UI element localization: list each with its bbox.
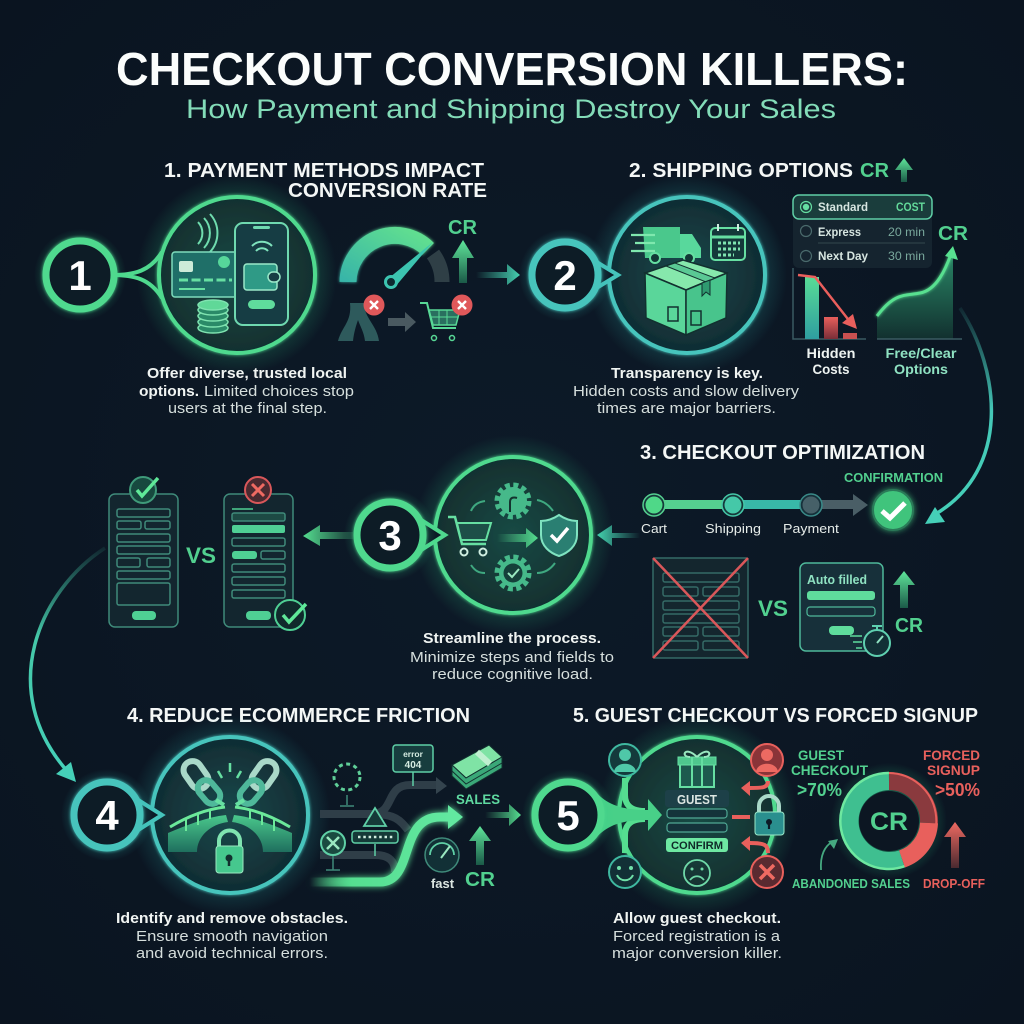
body text 1: Offer diverse, trusted local (147, 365, 347, 382)
auto filled form (800, 563, 890, 656)
shipping options list: COST (896, 200, 926, 214)
number badge 3: 3 (378, 512, 402, 559)
VS label right: VS (758, 596, 788, 621)
arrow: gray (388, 312, 416, 332)
number badge 2: 2 (553, 252, 577, 299)
number badge 5 with merged pointer arrow: 5 (556, 792, 580, 839)
red arrows (732, 781, 768, 853)
body text 1: users at the final step. (168, 400, 327, 417)
guest form: CONFIRM (671, 840, 723, 852)
body text 4: Identify and remove obstacles. (116, 910, 348, 927)
error 404 sign: 404 (405, 760, 422, 771)
forced signup stat (923, 747, 980, 800)
VS label left: VS (186, 543, 216, 568)
arrow: abandoned sales pointer (821, 839, 838, 870)
body text 1: options. (139, 383, 199, 400)
number badge 1 (34, 229, 126, 321)
bar chart: hidden costs (793, 268, 866, 377)
error 404 sign: error (403, 749, 424, 759)
area chart: free clear options (877, 223, 969, 377)
avatar: forced user (751, 744, 783, 776)
forced signup stat: >50% (935, 780, 980, 800)
sad face (684, 860, 710, 886)
auto filled form: Auto filled (807, 572, 867, 587)
body text 5: Forced registration is a (613, 928, 781, 945)
body text 2 (573, 365, 800, 417)
checkout stepper (641, 470, 943, 536)
fast gauge (425, 838, 459, 891)
body text 2: Transparency is key. (611, 365, 763, 382)
broken bridge illustration circle (130, 715, 330, 915)
body text 2: times are major barriers. (597, 400, 776, 417)
number badge 4 (61, 769, 162, 861)
guest checkout stat: >70% (797, 780, 842, 800)
panel: 5 guest checkout (522, 705, 985, 962)
heading 1: CONVERSION RATE (288, 180, 487, 202)
error 404 sign (393, 745, 433, 786)
arrow: 1 to 2 (476, 264, 520, 285)
heading 2 (629, 158, 913, 182)
body text 3: Minimize steps and fields to (410, 649, 614, 666)
number badge 4: 4 (95, 792, 119, 839)
guest checkout stat: GUEST (798, 747, 844, 763)
shipping options list: 30 min (888, 249, 925, 263)
donut chart (831, 763, 947, 879)
area chart: free clear options: Options (894, 361, 948, 377)
coin stack (198, 300, 228, 333)
body text 5 (612, 910, 782, 962)
checkout stepper: Cart (641, 521, 667, 536)
panel: 1 payment methods (34, 160, 520, 417)
forced signup stat: SIGNUP (927, 762, 980, 778)
heading 5: 5. GUEST CHECKOUT VS FORCED SIGNUP (573, 705, 978, 727)
shipping options list: Express (818, 225, 861, 239)
bar chart: hidden costs: Hidden (806, 345, 856, 361)
gift icon (678, 752, 716, 787)
CR up arrow (448, 217, 478, 283)
avatar: guest (609, 744, 641, 776)
body text 5: major conversion killer. (612, 945, 782, 962)
body text 4: Ensure smooth navigation (136, 928, 328, 945)
heading 2: CR (860, 160, 890, 182)
body text 3: reduce cognitive load. (432, 666, 593, 683)
broken bridge (168, 807, 292, 852)
smiley (609, 856, 641, 888)
body text 1: Limited choices stop (204, 383, 354, 400)
panel: 4 reduce friction (61, 705, 521, 962)
CR up arrow (893, 571, 924, 637)
area chart: free clear options: Free/Clear (886, 345, 957, 361)
number badge 2 (519, 229, 618, 321)
gauge chart (348, 235, 442, 288)
green road arrow (310, 805, 463, 882)
guest checkout stat: CHECKOUT (791, 762, 868, 778)
payment illustration circle (112, 175, 337, 375)
funnel blocked icon (338, 294, 384, 341)
guest checkout stat (791, 747, 868, 800)
panel: 3 checkout optimization (109, 435, 943, 683)
crossed-out long form (653, 558, 748, 658)
body text 4: and avoid technical errors. (136, 945, 328, 962)
checkout stepper: Shipping (705, 521, 761, 536)
heading 2: 2. SHIPPING OPTIONS (629, 160, 853, 182)
body text 1 (139, 365, 354, 417)
CR up arrow: CR (448, 217, 478, 239)
long form with x and check (224, 477, 306, 630)
CR up arrow: CR (465, 869, 496, 891)
arrow: to forms (303, 525, 353, 546)
guest form: GUEST (677, 792, 717, 807)
body text 2: Hidden costs and slow delivery (573, 383, 800, 400)
arrow: 3 to 4 curved (30, 548, 105, 782)
heading 1: 1. PAYMENT METHODS IMPACT (164, 160, 484, 182)
donut chart: CR (870, 808, 908, 836)
checkout stepper: Payment (783, 521, 839, 536)
guest checkout illustration circle (597, 715, 797, 915)
broken chain (180, 758, 280, 807)
forced signup stat: FORCED (923, 747, 980, 763)
heading 1 (164, 160, 487, 202)
short form with check (109, 477, 178, 627)
red drop-off arrow (944, 822, 966, 868)
panel: 2 shipping options (519, 158, 969, 417)
body text 3 (410, 630, 614, 683)
abandoned sales label: ABANDONED SALES (792, 876, 910, 891)
CR up arrow: CR (895, 615, 924, 637)
shipping options list: 20 min (888, 225, 925, 239)
shipping options list: Next Day (818, 249, 868, 263)
area chart: free clear options: CR (938, 223, 969, 245)
drop-off label: DROP-OFF (923, 876, 985, 891)
heading 3: 3. CHECKOUT OPTIMIZATION (640, 442, 925, 464)
parcel box (645, 260, 727, 335)
friction road diagram (310, 745, 463, 882)
spinner icon (334, 764, 360, 806)
body text 4 (116, 910, 348, 962)
arrow: to circle 3 (597, 525, 640, 546)
money stack: SALES (456, 791, 500, 807)
warning sign (364, 808, 386, 826)
body text 3: Streamline the process. (423, 630, 601, 647)
shipping options list: Standard (818, 200, 868, 214)
optimization illustration circle (413, 435, 613, 635)
number badge 5 with merged pointer arrow (522, 769, 662, 861)
heading 4: 4. REDUCE ECOMMERCE FRICTION (127, 705, 470, 727)
arrow: 4 to 5 (485, 804, 521, 826)
x sign (321, 831, 345, 870)
red x badge (751, 856, 783, 888)
shipping illustration circle (587, 175, 787, 375)
checkout stepper: CONFIRMATION (844, 470, 943, 485)
password field (352, 831, 398, 856)
padlock (755, 796, 784, 835)
title: CHECKOUT CONVERSION KILLERS: (116, 43, 908, 95)
shipping options list (793, 195, 932, 268)
title (116, 43, 908, 124)
fast gauge: fast (431, 876, 455, 891)
money stack (452, 745, 502, 807)
guest form (665, 790, 729, 852)
CR up arrow (465, 826, 496, 891)
subtitle: How Payment and Shipping Destroy Your Sales (186, 94, 836, 124)
bar chart: hidden costs: Costs (812, 361, 850, 377)
arrow: 2 to 3 curved (925, 308, 991, 524)
body text 5: Allow guest checkout. (613, 910, 781, 927)
number badge 1: 1 (68, 252, 92, 299)
cart blocked icon (420, 294, 472, 340)
number badge 3 (344, 489, 445, 581)
